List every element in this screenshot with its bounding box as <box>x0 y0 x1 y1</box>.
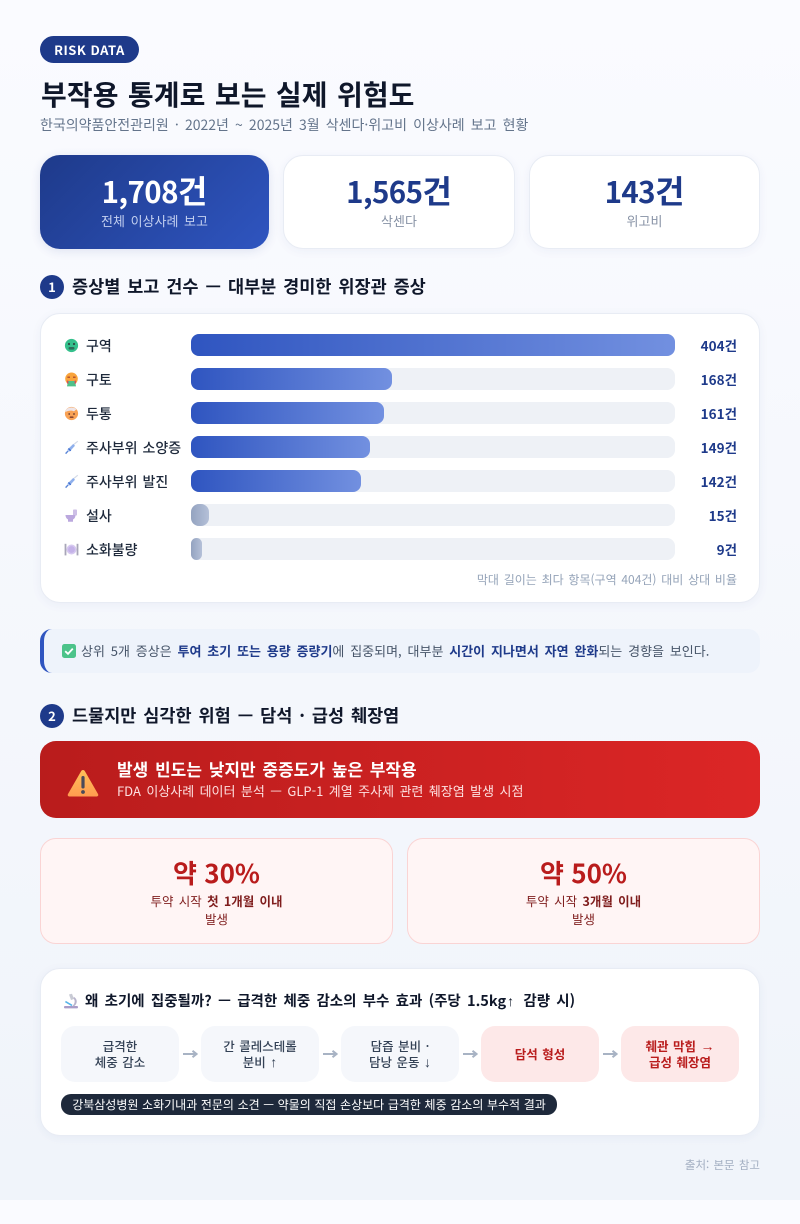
stat: about 50 percent: 발생 <box>572 909 595 928</box>
bar: diarrhea: 15건 <box>709 505 737 525</box>
stat card: Saxenda <box>283 155 515 249</box>
step 3: 담즙 분비 · <box>371 1036 429 1055</box>
badge: RISK DATA <box>40 36 139 63</box>
bar: nausea: 404건 <box>701 335 737 355</box>
section heading 2: 드물지만 심각한 위험 — 담석 · 급성 췌장염 <box>72 703 399 728</box>
bar: vomiting <box>65 368 737 390</box>
step 4 <box>481 1026 599 1082</box>
stat: about 50 percent <box>407 838 760 944</box>
step 5: 췌관 막힘 → <box>645 1036 714 1055</box>
subtitle: 한국의약품안전관리원 · 2022년 ~ 2025년 3월 삭센다·위고비 이상사례 보고 현황 <box>40 115 528 135</box>
panel: symptom bar chart <box>40 313 760 603</box>
bar: injection site rash: 142건 <box>701 471 737 491</box>
expert note: 강북삼성병원 소화기내과 전문의 소견 — 약물의 직접 손상보다 급격한 체중 감소의 부수적 결과 <box>72 1096 546 1113</box>
bar: nausea: 구역 <box>86 336 112 356</box>
stat: about 30 percent: 발생 <box>205 909 228 928</box>
section number 1 <box>40 275 64 299</box>
callout: top symptoms <box>40 629 760 673</box>
chart note: 막대 길이는 최다 항목(구역 404건) 대비 상대 비율 <box>477 571 737 588</box>
bar: indigestion: 9건 <box>717 539 737 559</box>
step 3 <box>341 1026 459 1082</box>
icon: check <box>62 644 76 658</box>
bar: nausea <box>64 334 737 356</box>
arrow <box>463 1050 478 1058</box>
title: 부작용 통계로 보는 실제 위험도 <box>41 74 415 114</box>
panel: why early <box>40 968 760 1136</box>
bar: vomiting: 구토 <box>86 370 112 390</box>
bar: diarrhea: 설사 <box>86 506 112 526</box>
arrow <box>323 1050 338 1058</box>
bar: injection site itching: 주사부위 소양증 <box>86 438 181 458</box>
icon: microscope <box>64 994 78 1008</box>
stat: about 30 percent <box>40 838 393 944</box>
bar: indigestion: 소화불량 <box>86 540 138 560</box>
alert banner <box>40 741 760 818</box>
stat card: Wegovy: 위고비 <box>627 211 662 230</box>
step 2: 간 콜레스테롤 <box>223 1036 297 1055</box>
bar: indigestion <box>64 538 737 560</box>
section number 2: 2 <box>48 706 56 725</box>
bar: diarrhea <box>66 504 737 526</box>
bar: injection site rash: 주사부위 발진 <box>86 472 168 492</box>
step 5: 급성 췌장염 <box>649 1052 711 1071</box>
stat card: total reports <box>40 155 269 249</box>
icon: warning <box>68 770 98 796</box>
stat card: Wegovy <box>529 155 760 249</box>
badge: RISK DATA: RISK DATA <box>54 40 125 59</box>
alert title: 발생 빈도는 낮지만 중증도가 높은 부작용 <box>117 756 417 781</box>
stat: about 30 percent: 약 30% <box>173 854 260 891</box>
stat card: total reports: 전체 이상사례 보고 <box>101 211 208 230</box>
stat: about 50 percent: 약 50% <box>540 854 627 891</box>
step 1: 급격한 <box>103 1036 137 1055</box>
step 1 <box>61 1026 179 1082</box>
step 3: 담낭 운동 ↓ <box>369 1052 431 1071</box>
bar: injection site itching <box>65 436 737 458</box>
section heading 1: 증상별 보고 건수 — 대부분 경미한 위장관 증상 <box>72 274 426 299</box>
bar: injection site itching: 149건 <box>701 437 737 457</box>
panel heading: 왜 초기에 집중될까? — 급격한 체중 감소의 부수 효과 (주당 1.5kg↑ 감량 시) <box>85 990 575 1011</box>
step 1: 체중 감소 <box>95 1052 145 1071</box>
step 5 <box>621 1026 739 1082</box>
bar: headache: 두통 <box>86 404 112 424</box>
stat: about 50 percent: 투약 시작 3개월 이내 <box>526 891 641 910</box>
stat: about 30 percent: 투약 시작 첫 1개월 이내 <box>150 891 283 910</box>
section number 1: 1 <box>48 277 56 296</box>
bar: vomiting: 168건 <box>701 369 737 389</box>
bar: headache <box>64 402 737 424</box>
alert subtitle: FDA 이상사례 데이터 분석 — GLP-1 계열 주사제 관련 췌장염 발생 시점 <box>117 781 523 800</box>
arrow <box>183 1050 198 1058</box>
section number 2 <box>40 704 64 728</box>
bar: injection site rash <box>65 470 737 492</box>
source: 출처: 본문 참고 <box>685 1157 760 1173</box>
stat card: Wegovy: 143건 <box>605 167 684 213</box>
callout text: 상위 5개 증상은 투여 초기 또는 용량 증량기에 집중되며, 대부분 시간이 지나면서 자연 완화되는 경향을 보인다. <box>81 641 709 660</box>
step 2: 분비 ↑ <box>243 1052 277 1071</box>
stat card: Saxenda: 1,565건 <box>346 167 452 213</box>
stat card: total reports: 1,708건 <box>102 167 207 213</box>
arrow <box>603 1050 618 1058</box>
bar: headache: 161건 <box>701 403 737 423</box>
stat card: Saxenda: 삭센다 <box>381 211 417 230</box>
step 4: 담석 형성 <box>515 1044 565 1063</box>
step 2 <box>201 1026 319 1082</box>
